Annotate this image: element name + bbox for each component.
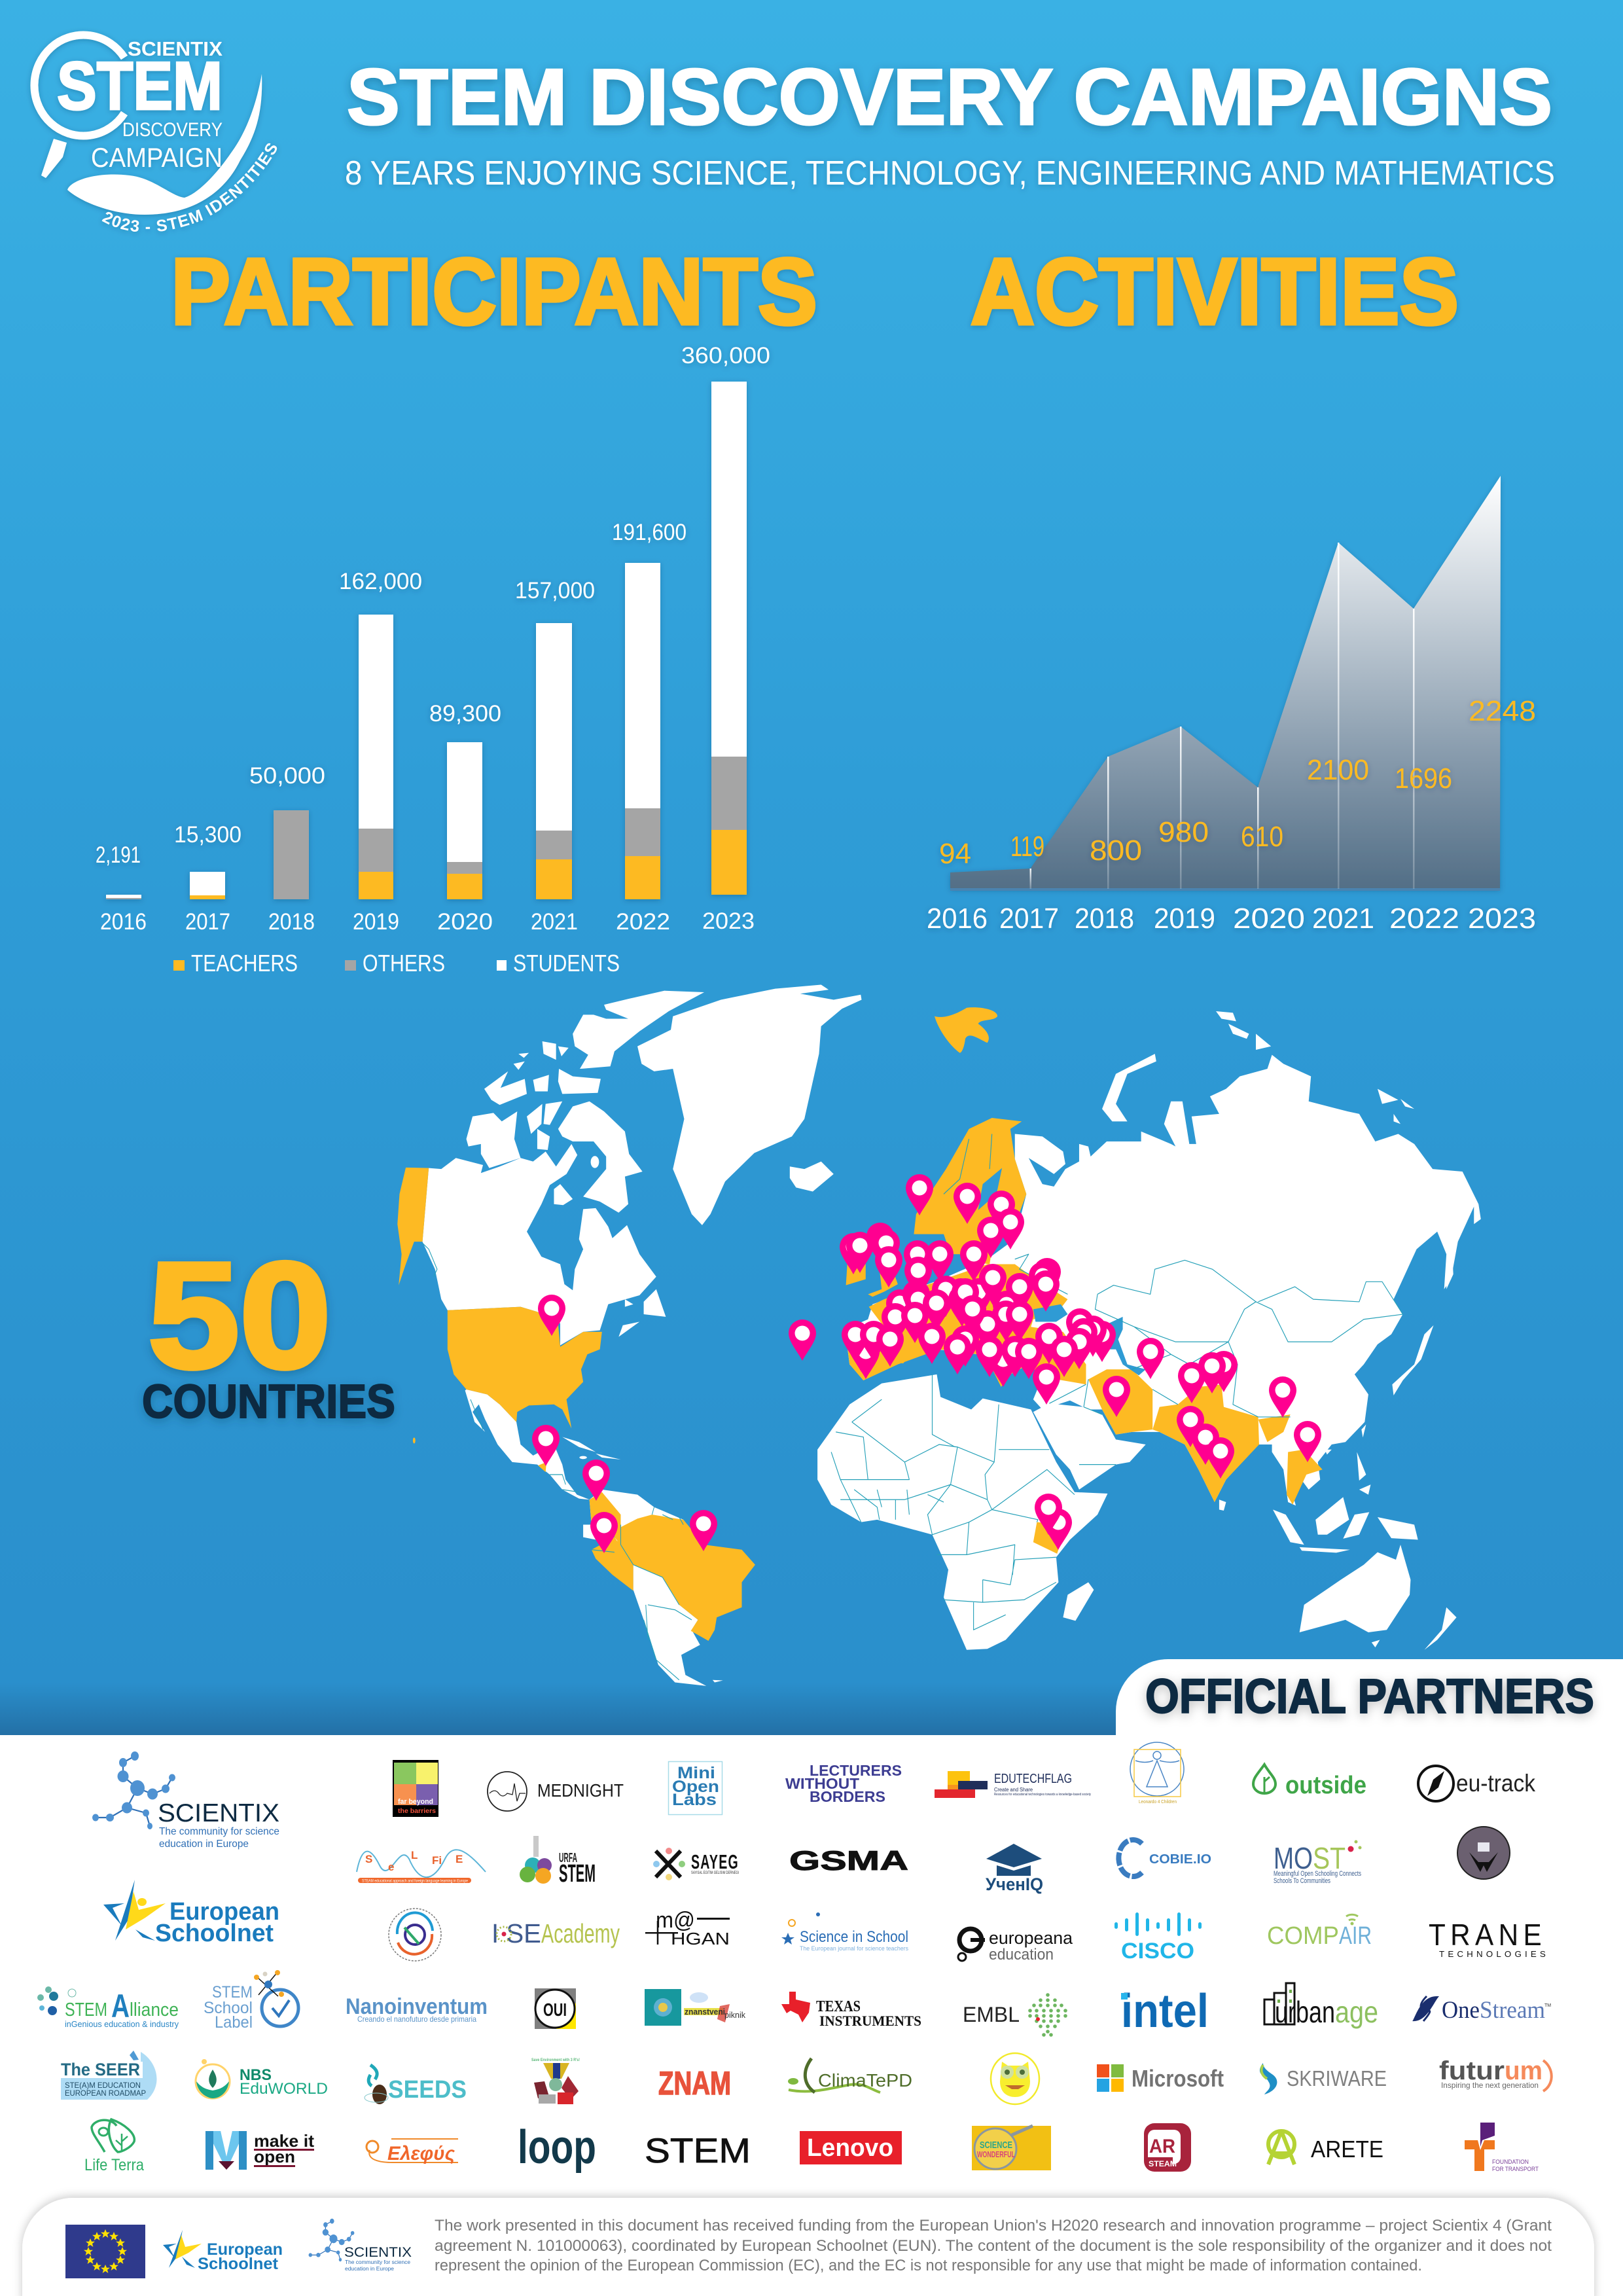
logo: AR STEAM: STEAM [1149,2159,1177,2168]
logo: university crest [1457,1827,1510,1879]
logo: far beyond the barriers: far beyond [398,1798,433,1806]
logo: Trane Technologies: TECHNOLOGIES [1439,1949,1549,1959]
logo: MOST: MO [1274,1841,1313,1875]
stat: 50 countries [142,1231,395,1428]
logo: Nanoinventum: Creando el nanofuturo desde primaria [357,2015,476,2024]
logo: Science in School: The European journal for science teachers [800,1945,908,1952]
logo: Arete: ARETE [1311,2136,1383,2162]
bar value labels: 162,000 [339,569,422,594]
bar 2023 [711,382,747,895]
logo: Lecturers Without Borders [785,1762,902,1805]
logo: outside [1253,1765,1366,1799]
logo: Leonardo 4 Children [1130,1742,1184,1804]
logo: STEM Alliance: inGenious education & industry [65,2019,179,2029]
logo: Compair: AIR [1339,1922,1372,1950]
logo: outside: outside [1285,1772,1366,1799]
logo: OUI: OUI [543,2000,567,2020]
bar legend: OTHERS [363,950,445,977]
logo: znanstveni piknik [645,1989,745,2026]
bar 2021 [536,623,572,899]
logo: Foundation for Transport [1465,2123,1539,2172]
logo: Elefys [366,2139,458,2164]
logo: ICSE Academy [491,1918,620,1948]
logo: AR STEAM: AR [1149,2136,1175,2157]
logo: MOST: ST [1313,1841,1346,1875]
logo: Intel: intel [1121,1985,1209,2037]
logo: EduTechFlag [935,1771,1091,1798]
logo: STEM Alliance: A [111,1988,130,2024]
logo: STEM School Label: School [204,1999,253,2017]
bar value labels: 360,000 [681,343,770,368]
logo: European Schoolnet [103,1880,279,1947]
area value labels: 94 [939,838,971,870]
logo: Scientix: SCIENTIX [158,1799,279,1827]
logo: far beyond the barriers [393,1760,438,1817]
logo: OneStream: TM [1544,2003,1551,2008]
bar 2017 [190,872,225,899]
logo: European Schoolnet: Schoolnet [155,1920,274,1947]
logo: ICSE Academy: Academy [541,1918,620,1948]
bar legend: TEACHERS [191,950,298,977]
logo: Urbanage [1264,1983,1378,2029]
area year axis: 2023 [1468,903,1536,935]
logo: Sayeg [653,1848,739,1880]
logo: Science in School: Science in School [800,1928,908,1946]
logo: OUI [535,1988,576,2029]
logo: Foundation for Transport: FOR TRANSPORT [1492,2166,1539,2172]
logo: Scientix STEM Discovery Campaign: CAMPAIGN [91,142,223,173]
logo: Lecturers Without Borders: BORDERS [810,1788,885,1805]
logo: EMBL: EMBL [963,2003,1020,2026]
logo: STEM Alliance [37,1986,179,2029]
logo: STEM School Label [204,1970,298,2032]
logo: The SEER: The SEER [61,2060,140,2079]
logo: Cisco [1115,1912,1202,1964]
logo: Foundation for Transport: FOUNDATION [1492,2159,1529,2165]
bar legend [173,950,620,977]
bar year axis: 2016 [100,909,147,935]
logo: OneStream: Stream [1480,1997,1545,2024]
logo: Scientix [92,1751,279,1850]
logo: Mini Open Labs: Open [672,1778,719,1796]
logo: Futurum: futur [1439,2056,1505,2085]
logo: Scientix small: SCIENTIX [344,2245,412,2260]
bar 2016 [106,895,141,899]
logo: znanstveni piknik: znanstveni [685,2007,725,2017]
logo: Selfie [357,1849,486,1884]
logo: eu-track: eu-track [1456,1770,1535,1797]
logo: Scientix STEM Discovery Campaign: DISCOVERY [122,119,223,141]
bar year axis: 2022 [616,909,670,935]
logo: Life Terra [84,2119,144,2174]
logo: Lecturers Without Borders: WITHOUT [785,1775,859,1792]
logo: Lenovo: Lenovo [807,2134,893,2162]
logo: NBS EduWORLD [196,2059,328,2098]
map: Americas and Greenland [397,984,862,1686]
logo: GSMA: GSMA [789,1845,908,1876]
logo: Trane Technologies: TRANE [1429,1918,1546,1952]
logo: EduTechFlag: Create and Share [994,1787,1033,1793]
logo: Urfa STEM: STEM [559,1860,596,1888]
logo: Scientix small: education in Europe [345,2266,395,2272]
logo: European Schoolnet: European [169,1898,279,1926]
logo: УченIQ [986,1844,1043,1894]
area value labels: 2100 [1307,754,1369,786]
logo: Selfie: e [388,1861,394,1873]
area year axis: 2021 [1312,903,1374,935]
logo: Futurum: Inspiring the next generation [1441,2081,1539,2090]
background: blue gradient [0,0,1623,1735]
logo: MOST: Schools To Communities [1274,1877,1330,1885]
area year axis: 2019 [1154,903,1215,935]
logo: Sayeg: SAYISAL EGITIM GELISIM DERNEGI [691,1871,739,1875]
title: STEM DISCOVERY CAMPAIGNS [347,52,1552,141]
panel: official partners tab [1116,1659,1623,1735]
logo: Scientix STEM Discovery Campaign: SCIENTIX [128,37,223,60]
logo: far beyond the barriers: the barriers [398,1808,436,1815]
logo: European Schoolnet small [163,2230,283,2273]
logo: Mini Open Labs: Labs [672,1791,717,1809]
heading: participants: PARTICIPANTS [171,239,817,344]
text: funding disclaimer: agreement N. 101000063), coordinated by European Schoolnet (EUN). The content of the document is the sole responsibility of the organizer and it does not [435,2237,1552,2255]
bar value labels: 2,191 [96,842,141,868]
logo: Urbanage: urban [1275,1995,1335,2029]
logo: make it open: open [254,2147,295,2166]
logo: EduTechFlag: EDUTECHFLAG [994,1772,1072,1786]
logo: Science Wonderful: SCIENCE [980,2140,1012,2151]
logo: Skriware [1260,2063,1387,2094]
logo: STEM Alliance: STEM [65,2000,107,2020]
logo: europeana education [958,1928,1073,1964]
logo: Seeds [365,2065,467,2104]
logo: eu-track [1418,1766,1535,1801]
logo: OneStream: One [1442,1997,1480,2024]
logo: Compair [1267,1914,1372,1950]
logo: make it open [205,2131,314,2170]
world map [397,984,1481,1686]
bar year axis: 2019 [353,909,399,935]
logo: The SEER: EUROPEAN ROADMAP [65,2089,146,2098]
logo: Seeds: SEEDS [388,2076,467,2104]
area value labels: 1696 [1395,762,1452,795]
logo: The SEER [61,2051,156,2100]
heading: activities: ACTIVITIES [971,239,1459,344]
logo: Selfie: L [411,1849,418,1861]
bar year axis: 2017 [185,909,230,935]
logo: znanstveni piknik: piknik [724,2010,745,2020]
logo: Science Wonderful [972,2126,1051,2170]
logo: Selfie: S [365,1853,372,1865]
logo: ClimaTePD: ClimaTePD [818,2070,912,2090]
logo: MOST: Meaningful Open Schooling Connects [1274,1870,1361,1878]
logo: European Schoolnet small: Schoolnet [198,2255,279,2273]
bar value labels: 89,300 [429,701,501,726]
area value labels: 610 [1241,821,1283,853]
logo: Futurum [1439,2056,1552,2091]
stat: 50 countries: COUNTRIES [142,1376,395,1428]
logo: M@thgan [645,1908,730,1948]
logo: Selfie: STEAM educational approach and foreign language learning in Europe [362,1880,469,1884]
text: funding disclaimer [435,2217,1552,2274]
logo: Cisco: CISCO [1121,1939,1194,1964]
logo: NBS EduWORLD: EduWORLD [240,2080,328,2098]
logo: Elefys: Ελεφύς [387,2143,455,2164]
logo: Urfa STEM: URFA [559,1851,577,1865]
logo: europeana education: europeana [989,1928,1073,1948]
logo: Scientix STEM Discovery Campaign [28,30,279,234]
bar value labels: 50,000 [249,763,325,789]
icon: EU flag [65,2225,145,2278]
map pins [532,1174,1321,1553]
logo: Futurum: um [1505,2056,1543,2085]
logo: Scientix STEM Discovery Campaign: STEM [57,48,223,124]
text: funding disclaimer: The work presented in this document has received funding from the European Union's H2020 research and innovation programme – project Scientix 4 (Grant [435,2217,1552,2234]
logo: circular network [389,1909,441,1961]
logo: Texas Instruments [781,1992,921,2029]
logo: europeana education: education [989,1946,1054,1964]
logo: MOST [1274,1840,1361,1885]
area value labels: 800 [1090,834,1142,867]
logo: Microsoft: Microsoft [1132,2065,1224,2092]
logo: Compair: COMP [1267,1922,1339,1950]
logo: Texas Instruments: INSTRUMENTS [819,2013,921,2029]
area value labels [939,695,1536,870]
logo: recycle environment: Save Environment with 3 R's! [531,2058,580,2062]
bar legend: STUDENTS [513,950,620,977]
area year axis [927,903,1536,935]
bar year axis: 2021 [531,909,578,935]
bar chart: participants [96,343,770,977]
logo: ClimaTePD [788,2058,912,2092]
logo: OneStream [1412,1996,1551,2024]
logo: STEM School Label: Label [215,2013,253,2032]
map: Eurasia, Africa and Oceania [817,1007,1481,1650]
text: funding disclaimer: represent the opinion of the European Commission (EC), and the EC is not responsible for any use that might be made of information contained. [435,2257,1422,2274]
logo: Urbanage: age [1335,1995,1378,2029]
logo: EduTechFlag: Resources for educational technologies towards a knowledge-based society [994,1793,1091,1797]
logo: Cobie.io [1118,1840,1211,1876]
bar year axis: 2020 [437,909,493,935]
logo: Mednight [488,1772,624,1811]
bar value labels: 157,000 [515,578,595,603]
logo: Scientix: The community for science [159,1826,279,1837]
logo: EMBL [963,1993,1067,2037]
logo: Cobie.io: COBIE.IO [1149,1852,1211,1867]
logo: European Schoolnet small: European [207,2240,283,2259]
logo: Texas Instruments: TEXAS [816,1998,861,2015]
area year axis: 2017 [999,903,1059,935]
logo: ZNAM: ZNAM [658,2065,731,2102]
logo: Nanoinventum: Nanoinventum [346,1994,488,2019]
logo: Mednight: MEDNIGHT [537,1780,624,1801]
logo: Mini Open Labs: Mini [677,1764,715,1782]
logo: Scientix small [309,2219,412,2272]
panel: funding footer [22,2198,1594,2296]
bar year axis: 2023 [702,908,755,934]
area chart: activities [927,476,1536,935]
bar value labels: 191,600 [612,520,687,545]
logo: Sayeg: SAYEG [691,1850,739,1873]
logo: Lecturers Without Borders: LECTURERS [810,1762,902,1779]
logo: Leonardo 4 Children: Leonardo 4 Children [1139,1800,1177,1804]
logo: M@thgan: HGAN [671,1929,730,1948]
logo: owl [991,2053,1039,2104]
area value labels: 980 [1158,816,1209,848]
logo: Skriware: SKRIWARE [1287,2066,1387,2090]
bar 2019 [359,615,393,899]
bar year axis: 2018 [268,909,315,935]
logo: STEM School Label: STEM [212,1983,253,2001]
logo: Scientix small: The community for science [345,2259,411,2265]
logo: Life Terra: Life Terra [84,2156,144,2174]
area value labels: 2248 [1469,695,1536,727]
logo: Mini Open Labs [669,1762,722,1814]
logo: The SEER: STE(A)M EDUCATION [65,2081,141,2090]
bar value labels [96,343,770,868]
logo: M@thgan: m@ [656,1908,695,1933]
logo: Scientix STEM Discovery Campaign: 2023 - STEM IDENTITIES [101,143,279,234]
logo: recycle environment [531,2058,580,2104]
bar 2022 [625,563,660,899]
logo: make it open: make it [254,2131,314,2151]
logo: Science in School [781,1912,908,1952]
stat: 50 countries: 50 [148,1231,331,1399]
logo: STEM wordmark: STEM [645,2132,751,2170]
logo: Scientix: education in Europe [159,1839,249,1850]
logo: Microsoft [1097,2064,1224,2092]
bar year axis [100,908,755,935]
bar 2020 [447,742,482,899]
logo: Urfa STEM [520,1836,596,1888]
bar 2018 [274,810,309,899]
logo: Science Wonderful: WONDERFUL [977,2149,1015,2159]
logo: AR STEAM [1144,2123,1191,2172]
logo: ICSE Academy: I SE [491,1918,541,1948]
bar value labels: 15,300 [174,822,241,848]
logo: Arete [1268,2131,1383,2164]
logo: УченIQ: УченIQ [986,1874,1043,1894]
area value labels: 119 [1010,831,1044,863]
logo: STEM Alliance: lliance [130,2000,179,2020]
logo: Selfie: Fi [432,1854,442,1867]
logo: Selfie: E [455,1853,463,1865]
logo: NBS EduWORLD: NBS [240,2066,272,2084]
logo: Loop: loop [518,2121,596,2174]
area year axis: 2016 [927,903,988,935]
area year axis: 2018 [1075,903,1134,935]
area year axis: 2020 [1233,903,1305,935]
area year axis: 2022 [1389,903,1459,935]
